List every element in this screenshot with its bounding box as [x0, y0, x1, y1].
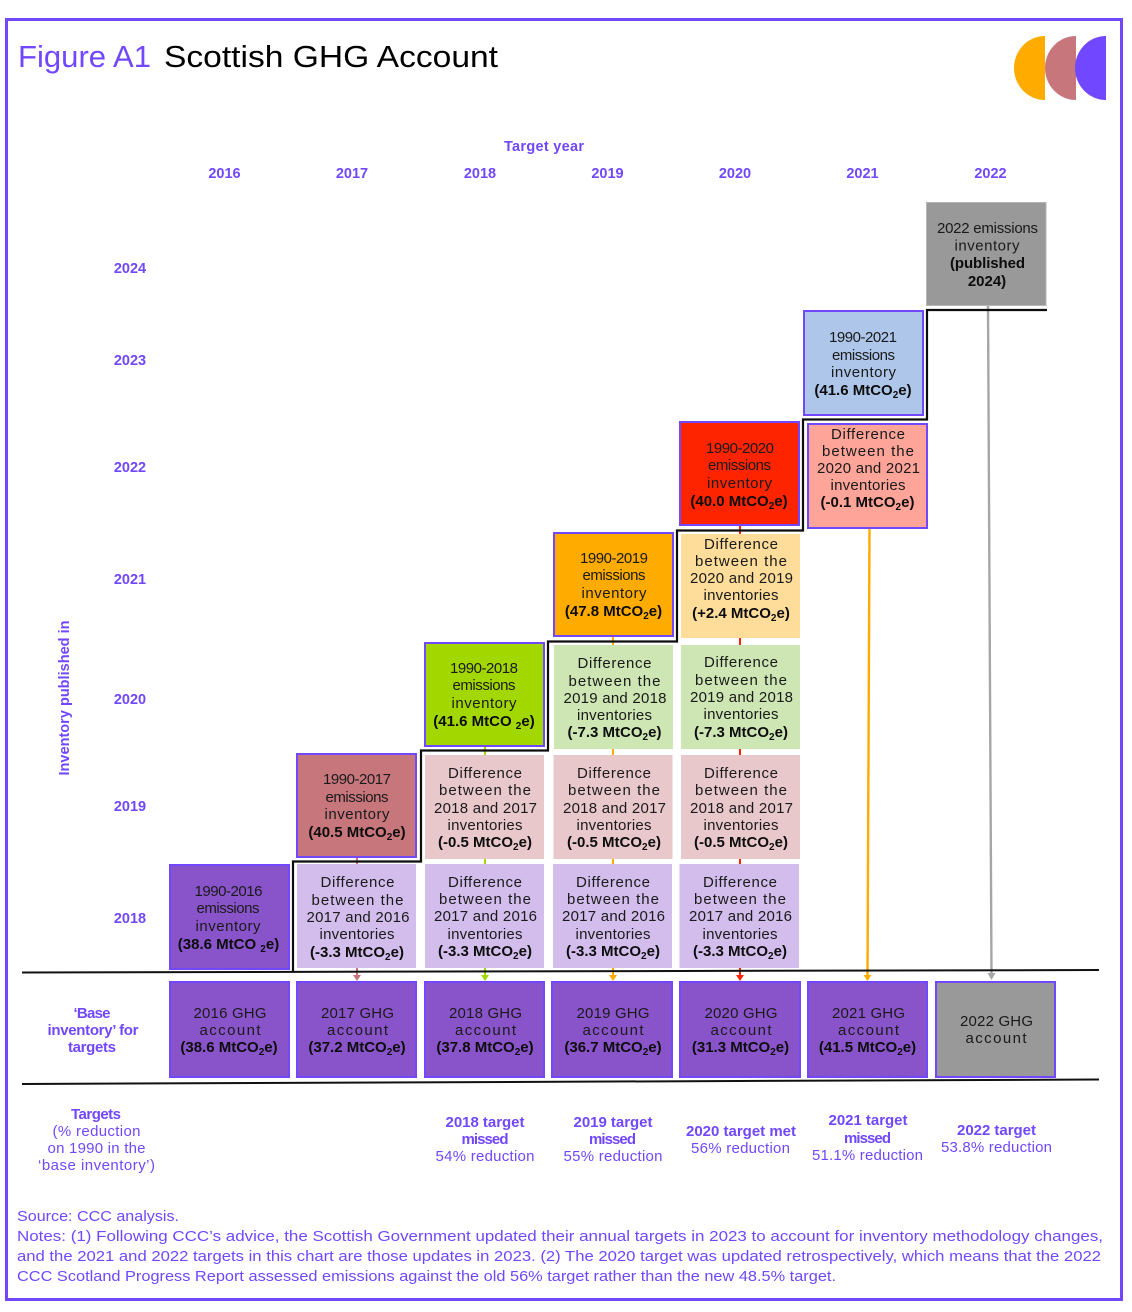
box: difference 2018-2017, 2019 column: 2: [642, 842, 648, 853]
box: difference 2020-2019, 2020 column: 2: [771, 613, 777, 624]
box: 2019 inventory: [554, 533, 673, 636]
box: 2019 inventory: (47.8 MtCO: [565, 603, 643, 620]
box: difference 2020-2019, 2020 column: [681, 534, 800, 638]
row label: base inventory for targets: ‘Base: [74, 1005, 110, 1022]
title: Figure A1: [18, 39, 151, 74]
box: 2020 inventory: inventory: [707, 475, 772, 492]
box: difference 2018-2017, 2018 column: 2: [513, 842, 519, 853]
box: difference 2019-2018, 2020 column: (-7.3 MtCO: [694, 724, 769, 741]
box: difference 2018-2017, 2019 column: e): [648, 834, 661, 851]
box: difference 2018-2017, 2020 column: Difference: [704, 765, 778, 782]
box: difference 2020-2021, 2021 column: inventories: [830, 477, 906, 494]
box: difference 2018-2017, 2018 column: (-0.5 MtCO: [438, 834, 513, 851]
target year labels: 2020: [719, 166, 751, 182]
box: difference 2018-2017, 2018 column: 2018 and 2017: [434, 800, 537, 817]
box: 2017 inventory: emissions: [326, 789, 388, 806]
logo: three half circles: [1014, 36, 1106, 100]
box: difference 2017-2016, 2019 column: between the: [567, 891, 659, 908]
arrow: 2019: [609, 635, 617, 981]
box: difference 2018-2017, 2019 column: [554, 755, 672, 859]
box: difference 2019-2018, 2020 column: Difference: [704, 654, 778, 671]
box: 2018 GHG account: 2: [515, 1047, 521, 1058]
box: 2022 inventory: inventory: [954, 238, 1020, 254]
row label: targets: (% reduction: [52, 1123, 140, 1140]
box: difference 2019-2018, 2019 column: between the: [568, 673, 660, 690]
box: difference 2019-2018, 2020 column: 2: [769, 732, 775, 743]
inventory year labels: 2020: [114, 692, 146, 708]
box: 2020 inventory: emissions: [708, 457, 771, 474]
box: 2016 GHG account: 2016 GHG: [194, 1005, 266, 1022]
box: 2018 inventory: 1990-2018: [450, 660, 518, 677]
target: 2021: 51.1% reduction: [812, 1147, 923, 1164]
box: difference 2019-2018, 2019 column: (-7.3 MtCO: [568, 724, 643, 741]
box: difference 2017-2016, 2017 column: inventories: [320, 926, 394, 943]
box: difference 2017-2016, 2020 column: [680, 864, 799, 968]
row label: base inventory for targets: [48, 1005, 139, 1056]
box: difference 2020-2021, 2021 column: Difference: [831, 426, 905, 443]
row label: base inventory for targets: targets: [68, 1039, 116, 1056]
box: 2020 GHG account: [680, 982, 800, 1077]
target: 2018: missed: [462, 1131, 508, 1148]
box: difference 2017-2016, 2017 column: between the: [312, 892, 404, 909]
target: 2021: missed: [844, 1130, 891, 1147]
inventory year labels: [114, 261, 146, 927]
box: 2016 inventory: 1990-2016: [194, 883, 262, 900]
box: 2020 GHG account: 2020 GHG: [704, 1005, 778, 1022]
box: difference 2019-2018, 2019 column: e): [648, 724, 661, 741]
box: 2016 inventory: e): [266, 936, 279, 953]
inventory year labels: 2023: [114, 353, 146, 369]
box: 2018 GHG account: e): [520, 1039, 534, 1056]
box: 2020 GHG account: (31.3 MtCO: [692, 1039, 770, 1056]
box: difference 2017-2016, 2020 column: e): [774, 943, 787, 960]
target year labels: 2021: [846, 166, 879, 182]
box: 2016 inventory: [170, 865, 289, 969]
arrow: 2017: [353, 856, 361, 981]
box: 2021 inventory: [804, 311, 923, 415]
row label: targets: on 1990 in the: [48, 1140, 146, 1157]
target year labels: 2017: [336, 166, 368, 182]
box: difference 2017-2016, 2017 column: [297, 864, 416, 968]
target year labels: 2019: [591, 166, 624, 182]
target: 2021: [812, 1112, 923, 1164]
box: difference 2019-2018, 2019 column: 2019 and 2018: [564, 690, 666, 707]
box: 2021 inventory: 2: [893, 390, 899, 401]
box: difference 2020-2019, 2020 column: inventories: [704, 587, 778, 604]
target: 2018: [436, 1114, 534, 1165]
box: difference 2018-2017, 2019 column: 2018 and 2017: [563, 800, 666, 817]
box: 2021 GHG account: account: [838, 1022, 900, 1039]
box: difference 2018-2017, 2020 column: between the: [695, 782, 787, 799]
box: difference 2017-2016, 2020 column: between the: [694, 891, 786, 908]
target: 2020: 2020 target met: [686, 1123, 796, 1140]
box: 2020 GHG account: account: [710, 1022, 772, 1039]
box: 2018 GHG account: [425, 982, 544, 1077]
box: difference 2017-2016, 2020 column: Difference: [703, 874, 777, 891]
box: difference 2017-2016, 2018 column: Difference: [448, 874, 522, 891]
box: 2018 inventory: emissions: [452, 677, 516, 694]
box: 2021 GHG account: [808, 982, 927, 1077]
upper divider line: [22, 970, 1099, 972]
box: 2019 GHG account: 2: [643, 1047, 649, 1058]
box: 2019 inventory: e): [649, 603, 662, 620]
box: 2019 GHG account: account: [582, 1022, 644, 1039]
box: 2019 inventory: inventory: [582, 585, 647, 602]
box: difference 2019-2018, 2019 column: inventories: [577, 707, 652, 724]
stepped line separating published inventories: [293, 310, 1047, 971]
box: difference 2018-2017, 2019 column: between the: [568, 782, 660, 799]
box: difference 2018-2017, 2020 column: 2: [769, 842, 775, 853]
box: difference 2017-2016, 2019 column: e): [647, 943, 660, 960]
target: 2020: [686, 1123, 796, 1157]
box: difference 2017-2016, 2019 column: 2017 and 2016: [562, 908, 665, 925]
target: 2019: 55% reduction: [564, 1148, 662, 1165]
title: [18, 39, 498, 74]
box: difference 2017-2016, 2018 column: (-3.3 MtCO: [438, 943, 513, 960]
box: 2019 inventory: 1990-2019: [580, 550, 648, 567]
box: 2020 inventory: (40.0 MtCO: [690, 493, 769, 510]
box: difference 2017-2016, 2020 column: 2: [768, 951, 774, 962]
box: difference 2020-2019, 2020 column: 2020 and 2019: [690, 570, 793, 587]
box: 2020 GHG account: e): [776, 1039, 789, 1056]
box: 2017 inventory: e): [392, 824, 406, 841]
box: difference 2018-2017, 2020 column: (-0.5 MtCO: [694, 834, 769, 851]
lower divider line: [22, 1080, 1099, 1084]
row label: base inventory for targets: inventory’ for: [48, 1022, 139, 1039]
inventory year labels: 2021: [114, 572, 146, 588]
box: difference 2017-2016, 2019 column: inventories: [576, 926, 650, 943]
box: 2018 GHG account: account: [455, 1022, 517, 1039]
box: 2017 GHG account: [297, 982, 416, 1077]
arrow: 2022: [988, 304, 996, 980]
box: difference 2017-2016, 2017 column: (-3.3 MtCO: [310, 944, 385, 961]
box: 2016 GHG account: [170, 982, 289, 1077]
box: 2017 GHG account: 2: [387, 1047, 393, 1058]
box: 2018 inventory: (41.6 MtCO: [433, 713, 512, 730]
target: 2022: 2022 target: [957, 1122, 1036, 1139]
box: difference 2018-2017, 2019 column: Difference: [577, 765, 651, 782]
box: 2020 inventory: 1990-2020: [706, 440, 774, 457]
box: difference 2017-2016, 2018 column: inventories: [448, 926, 522, 943]
title: Scottish GHG Account: [164, 39, 498, 74]
target: 2019: 2019 target: [574, 1114, 652, 1131]
box: difference 2018-2017, 2018 column: e): [519, 834, 532, 851]
box: 2022 GHG account: account: [966, 1030, 1027, 1047]
box: difference 2018-2017, 2020 column: [681, 755, 800, 859]
box: 2022 inventory: (published: [950, 255, 1025, 272]
target year labels: [208, 166, 1007, 182]
target: 2021: 2021 target: [828, 1112, 908, 1129]
box: 2017 inventory: [297, 754, 416, 857]
box: 2021 GHG account: 2021 GHG: [832, 1005, 905, 1022]
box: difference 2019-2018, 2019 column: 2: [643, 732, 649, 743]
box: difference 2019-2018, 2020 column: between the: [695, 672, 787, 689]
inventory year labels: 2024: [114, 261, 146, 277]
box: 2022 inventory: [926, 202, 1046, 306]
box: difference 2020-2021, 2021 column: between the: [822, 443, 914, 460]
target: 2022: [941, 1122, 1052, 1156]
box: difference 2017-2016, 2020 column: inventories: [702, 926, 778, 943]
box: difference 2018-2017, 2018 column: Difference: [448, 765, 522, 782]
box: difference 2018-2017, 2018 column: [425, 755, 544, 859]
box: 2016 inventory: 2: [260, 944, 266, 955]
box: 2018 GHG account: 2018 GHG: [449, 1005, 522, 1022]
source and notes: Source: CCC analysis.: [17, 1208, 179, 1225]
box: difference 2018-2017, 2020 column: e): [775, 834, 788, 851]
box: 2022 inventory: 2024): [968, 273, 1006, 290]
axis heading: target year: Target year: [504, 139, 584, 155]
box: 2018 GHG account: (37.8 MtCO: [436, 1039, 515, 1056]
box: difference 2020-2021, 2021 column: e): [901, 494, 914, 511]
box: difference 2017-2016, 2019 column: (-3.3 MtCO: [566, 943, 641, 960]
box: 2017 inventory: inventory: [324, 806, 390, 823]
box: 2018 inventory: e): [521, 713, 535, 730]
box: 2017 inventory: 2: [387, 832, 393, 843]
box: difference 2017-2016, 2020 column: (-3.3 MtCO: [693, 943, 768, 960]
source and notes: [17, 1208, 1103, 1285]
row label: targets: Targets: [71, 1106, 121, 1123]
box: difference 2017-2016, 2017 column: 2: [385, 952, 391, 963]
box: 2016 GHG account: account: [200, 1022, 261, 1039]
box: 2019 GHG account: 2019 GHG: [576, 1005, 650, 1022]
box: difference 2017-2016, 2018 column: 2: [513, 951, 519, 962]
inventory year labels: 2019: [114, 799, 146, 815]
box: 2016 GHG account: (38.6 MtCO: [180, 1039, 259, 1056]
box: difference 2017-2016, 2018 column: e): [519, 943, 532, 960]
box: 2022 GHG account: 2022 GHG: [960, 1013, 1033, 1030]
target year labels: 2018: [464, 166, 496, 182]
arrow: 2018: [481, 745, 489, 981]
source and notes: and the 2021 and 2022 targets in this chart are those updates in 2023. (2) The 2020 target was updated retrospectively, which means that the 2022: [17, 1248, 1101, 1265]
box: difference 2017-2016, 2018 column: [425, 864, 544, 968]
box: difference 2018-2017, 2018 column: between the: [439, 782, 531, 799]
inventory year labels: 2018: [114, 911, 146, 927]
target: 2019: missed: [589, 1131, 636, 1148]
box: difference 2020-2021, 2021 column: 2020 and 2021: [817, 460, 920, 477]
box: 2017 inventory: (40.5 MtCO: [308, 824, 387, 841]
box: difference 2019-2018, 2020 column: e): [775, 724, 788, 741]
box: difference 2018-2017, 2019 column: inventories: [576, 817, 652, 834]
target: 2020: 56% reduction: [691, 1140, 790, 1157]
box: 2019 GHG account: (36.7 MtCO: [564, 1039, 643, 1056]
box: 2021 GHG account: (41.5 MtCO: [819, 1039, 897, 1056]
box: difference 2018-2017, 2018 column: inventories: [448, 817, 522, 834]
box: 2021 GHG account: e): [903, 1039, 916, 1056]
box: 2017 GHG account: 2017 GHG: [321, 1005, 394, 1022]
box: difference 2017-2016, 2017 column: e): [391, 944, 404, 961]
box: 2017 GHG account: account: [327, 1022, 389, 1039]
box: difference 2018-2017, 2019 column: (-0.5 MtCO: [567, 834, 642, 851]
box: 2017 GHG account: e): [392, 1039, 406, 1056]
box: 2022 GHG account: [936, 982, 1055, 1077]
target year labels: 2022: [974, 166, 1007, 182]
row label: targets: ‘base inventory’): [38, 1157, 155, 1174]
box: difference 2018-2017, 2020 column: inventories: [704, 817, 778, 834]
box: difference 2017-2016, 2017 column: Difference: [320, 874, 394, 891]
box: 2018 inventory: [425, 643, 544, 746]
inventory year labels: 2022: [114, 460, 146, 476]
box: difference 2017-2016, 2017 column: 2017 and 2016: [306, 909, 410, 926]
source and notes: CCC Scotland Progress Report assessed emissions against the old 56% target rather than the new 48.5% target.: [17, 1268, 836, 1285]
box: difference 2019-2018, 2020 column: 2019 and 2018: [690, 689, 793, 706]
box: difference 2020-2021, 2021 column: [808, 424, 927, 528]
box: 2020 inventory: 2: [769, 501, 775, 512]
box: 2022 inventory: 2022 emissions: [937, 220, 1038, 237]
box: 2017 inventory: 1990-2017: [323, 771, 391, 788]
box: difference 2018-2017, 2020 column: 2018 and 2017: [690, 800, 793, 817]
box: 2021 inventory: inventory: [831, 364, 896, 381]
box: difference 2017-2016, 2019 column: 2: [641, 951, 647, 962]
arrow: 2020: [736, 524, 744, 981]
box: difference 2019-2018, 2019 column: [554, 645, 673, 749]
axis heading: inventory published in: Inventory published in: [57, 620, 73, 776]
box: 2021 inventory: e): [898, 382, 912, 399]
box: 2016 inventory: (38.6 MtCO: [178, 936, 256, 953]
box: difference 2019-2018, 2020 column: [681, 645, 800, 749]
box: difference 2017-2016, 2018 column: 2017 and 2016: [434, 908, 537, 925]
box: 2016 inventory: emissions: [196, 900, 260, 917]
arrows from inventories down to GHG accounts: [353, 304, 996, 981]
box: 2019 GHG account: e): [648, 1039, 662, 1056]
target: 2022: 53.8% reduction: [941, 1139, 1052, 1156]
box: difference 2020-2021, 2021 column: 2: [896, 502, 902, 513]
box: difference 2020-2021, 2021 column: (-0.1 MtCO: [821, 494, 896, 511]
target: 2018: 2018 target: [446, 1114, 524, 1131]
box: 2018 inventory: inventory: [452, 695, 517, 712]
box: 2021 GHG account: 2: [897, 1047, 903, 1058]
box: 2019 inventory: emissions: [582, 567, 646, 584]
box: difference 2017-2016, 2018 column: between the: [439, 891, 531, 908]
box: 2021 inventory: (41.6 MtCO: [814, 382, 893, 399]
box: 2020 GHG account: 2: [770, 1047, 776, 1058]
box: 2020 inventory: e): [774, 493, 788, 510]
row label: targets: [38, 1106, 155, 1174]
target: 2018: 54% reduction: [436, 1148, 534, 1165]
box: difference 2020-2019, 2020 column: Difference: [704, 536, 778, 553]
box: difference 2020-2019, 2020 column: e): [776, 605, 790, 622]
box: 2016 GHG account: e): [264, 1039, 278, 1056]
target: 2019: [564, 1114, 662, 1165]
source and notes: Notes: (1) Following CCC’s advice, the Scottish Government updated their annual targets in 2023 to account for inventory methodology changes,: [17, 1228, 1103, 1245]
box: 2021 inventory: emissions: [832, 347, 895, 364]
box: 2021 inventory: 1990-2021: [829, 329, 897, 346]
box: difference 2019-2018, 2019 column: Difference: [578, 655, 652, 672]
box: difference 2017-2016, 2019 column: Difference: [576, 874, 650, 891]
target year labels: 2016: [208, 166, 241, 182]
arrow: 2021: [864, 527, 872, 981]
box: 2019 inventory: 2: [643, 611, 649, 622]
box: 2016 GHG account: 2: [259, 1047, 265, 1058]
box: 2020 inventory: [680, 422, 799, 525]
box: 2019 GHG account: [552, 982, 672, 1077]
box: difference 2020-2019, 2020 column: between the: [695, 553, 787, 570]
box: difference 2017-2016, 2019 column: [553, 864, 672, 968]
box: difference 2017-2016, 2020 column: 2017 and 2016: [689, 908, 792, 925]
box: difference 2019-2018, 2020 column: inventories: [704, 706, 778, 723]
box: 2017 GHG account: (37.2 MtCO: [308, 1039, 387, 1056]
box: 2016 inventory: inventory: [196, 918, 261, 935]
box: 2018 inventory: 2: [516, 721, 522, 732]
box: difference 2020-2019, 2020 column: (+2.4 MtCO: [692, 605, 771, 622]
